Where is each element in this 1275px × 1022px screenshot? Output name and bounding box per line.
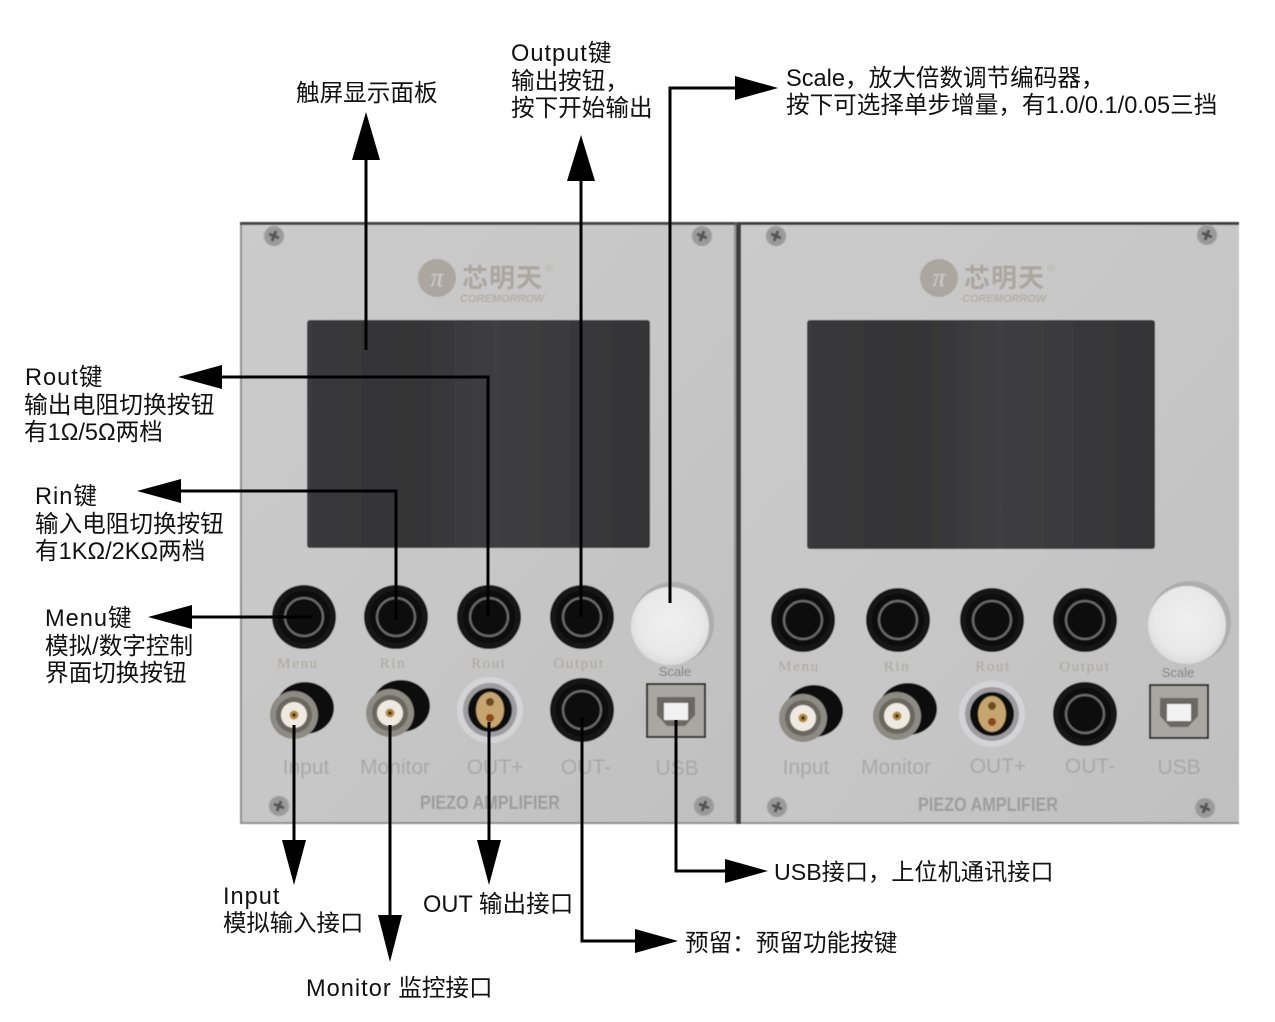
label: output key: 按下开始输出 — [511, 95, 653, 122]
arrow: reserved — [582, 717, 678, 953]
button labels: Rout — [471, 656, 507, 672]
label: rout key: 键 — [79, 364, 102, 391]
button labels: Output — [553, 656, 605, 672]
input connectors — [270, 677, 706, 743]
arrow: menu key — [148, 605, 312, 629]
connector labels: USB — [655, 757, 699, 780]
label: rin key: 有1KΩ/2KΩ两档 — [35, 538, 205, 565]
input connectors — [779, 681, 1209, 747]
label: out: OUT 输出接口 — [423, 891, 573, 918]
model name: PIEZO AMPLIFIER — [918, 795, 1058, 816]
connector labels: OUT+ — [467, 756, 523, 779]
label: rout key: Rout — [25, 365, 79, 391]
label: menu key: Menu — [45, 606, 108, 632]
button labels: Rout — [975, 659, 1011, 675]
button labels: Menu — [277, 656, 319, 672]
label: menu key: 键 — [108, 605, 132, 632]
scale knob — [631, 582, 714, 665]
scale label: Scale — [1162, 665, 1194, 680]
arrow: touch screen — [352, 112, 380, 350]
label: menu key: 模拟/数字控制 — [45, 633, 193, 660]
icon: screws — [766, 225, 1217, 818]
connector labels: Monitor — [861, 756, 931, 779]
button labels: Rin — [884, 659, 910, 675]
scale knob — [1148, 581, 1231, 664]
panel: left amplifier module — [240, 222, 736, 824]
button labels: Rin — [380, 656, 406, 672]
label: output key: 键 — [588, 40, 611, 67]
label: rin key: 键 — [73, 483, 97, 510]
arrow: usb — [676, 720, 768, 883]
button labels: Menu — [778, 659, 820, 675]
arrow: out — [477, 722, 501, 885]
logo — [920, 259, 1055, 305]
buttons row — [771, 588, 1117, 652]
connector labels: OUT- — [1065, 755, 1115, 778]
button labels — [778, 659, 1111, 675]
label: usb: USB接口，上位机通讯接口 — [774, 859, 1054, 885]
scale label: Scale — [659, 664, 691, 679]
label: rout key: 输出电阻切换按钮 — [24, 392, 214, 419]
arrow: input — [282, 725, 306, 885]
arrow: rout key — [178, 365, 488, 617]
panel: right amplifier module — [736, 222, 1239, 824]
model name: PIEZO AMPLIFIER — [420, 793, 560, 814]
connector labels: Monitor — [360, 756, 430, 779]
label: rin key: 输入电阻切换按钮 — [35, 511, 224, 538]
label: input: Input — [223, 884, 280, 910]
connector labels: Input — [783, 756, 830, 779]
connector labels: OUT+ — [970, 755, 1026, 778]
label: output key: 输出按钮， — [511, 68, 629, 95]
touch screen — [307, 320, 650, 548]
buttons row — [272, 585, 614, 649]
button labels — [277, 656, 605, 672]
label: reserved: 预留：预留功能按键 — [685, 930, 897, 957]
label: rin key: Rin — [35, 484, 73, 510]
label: monitor: Monitor 监控接口 — [306, 975, 493, 1002]
arrow: scale encoder — [670, 76, 778, 603]
label: menu key: 界面切换按钮 — [45, 660, 187, 687]
logo — [418, 259, 553, 305]
icon: screws — [264, 226, 714, 816]
label: scale encoder: Scale，放大倍数调节编码器， — [786, 65, 1105, 92]
connector labels: Input — [283, 756, 330, 779]
arrow: monitor — [378, 725, 402, 962]
label: input: 模拟输入接口 — [223, 910, 363, 936]
connector labels: USB — [1157, 756, 1201, 779]
arrow: rin key — [137, 479, 396, 620]
label: touch panel: 触屏显示面板 — [296, 80, 438, 107]
connector labels — [783, 755, 1201, 779]
connector labels — [283, 756, 699, 780]
connector labels: OUT- — [561, 756, 611, 779]
button labels: Output — [1059, 659, 1111, 675]
label: output key: Output — [511, 41, 588, 67]
label: rout key: 有1Ω/5Ω两档 — [24, 419, 163, 446]
label: scale encoder: 按下可选择单步增量，有1.0/0.1/0.05三挡 — [786, 92, 1217, 119]
touch screen — [807, 320, 1155, 549]
arrow: output key — [567, 135, 595, 617]
